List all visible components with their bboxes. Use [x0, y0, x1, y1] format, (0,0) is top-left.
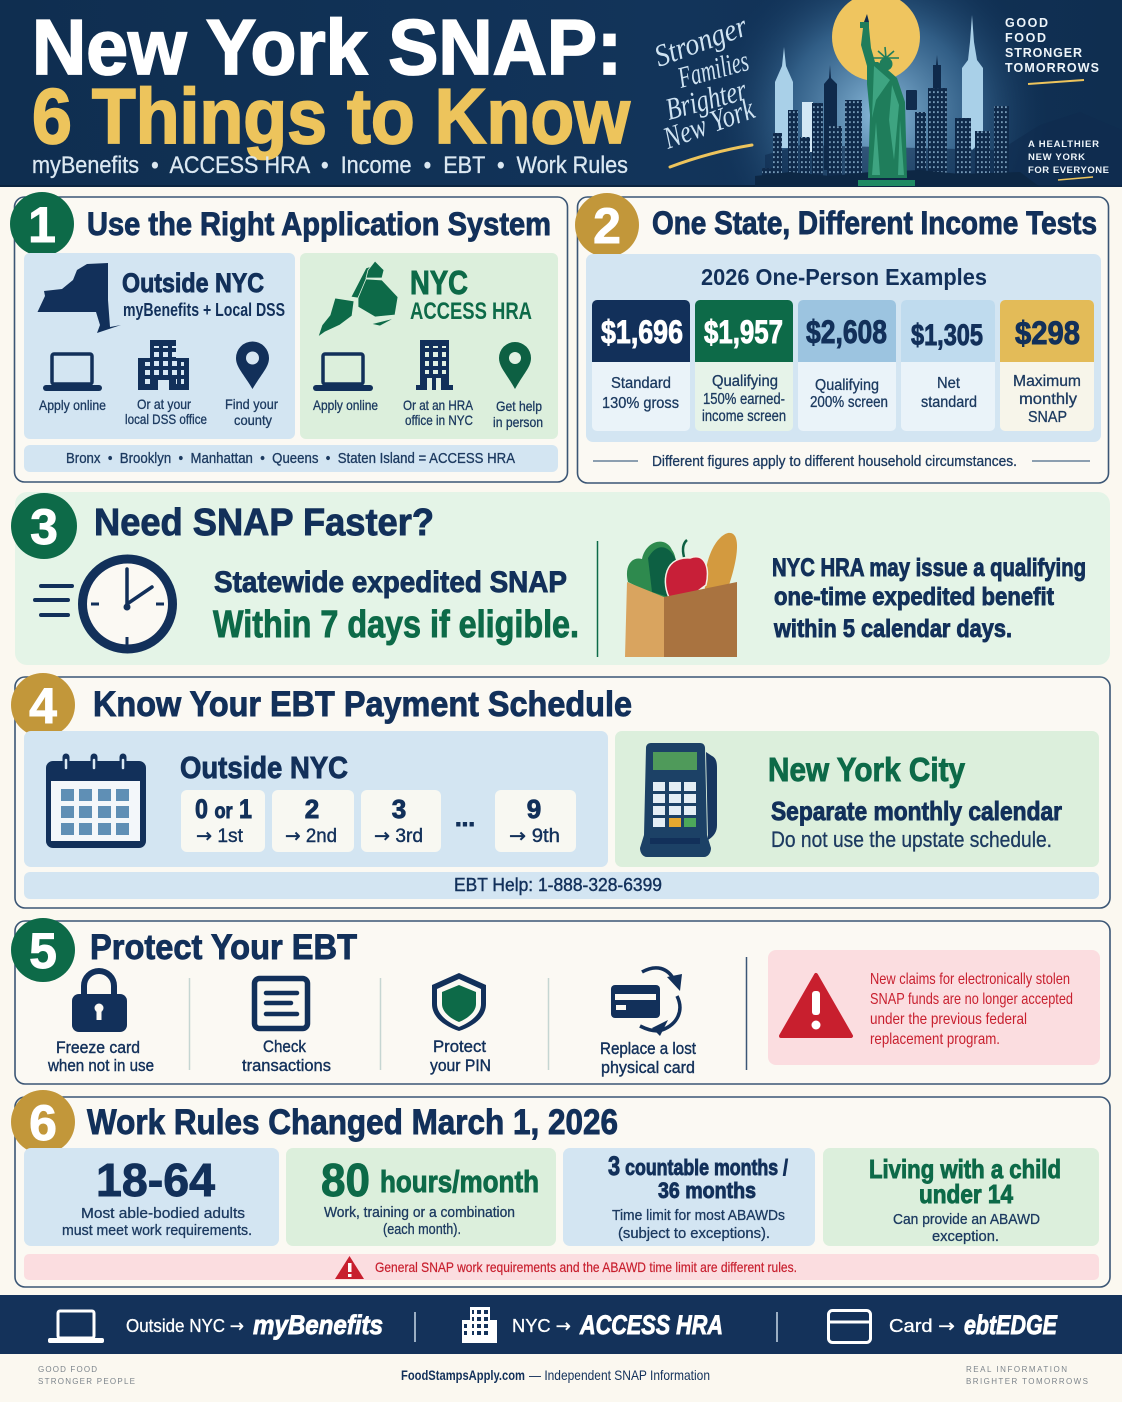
card: 1,696: 130% gross — [602, 395, 679, 412]
card: 80 hours: (each month). — [383, 1221, 461, 1238]
item: protect PIN: Protect — [433, 1037, 486, 1056]
item: freeze card: Freeze card — [56, 1038, 140, 1057]
tagline: healthier: NEW YORK — [1028, 152, 1085, 163]
card: 298: monthly — [1019, 391, 1077, 408]
card: 18-64: must meet work requirements. — [62, 1222, 252, 1239]
outside NYC heading: Outside NYC — [122, 268, 264, 298]
chip: 9: → 9th — [509, 825, 560, 847]
sub-panel: outside NYC schedule — [24, 731, 608, 867]
icon: office building — [138, 340, 189, 390]
tagline: healthier: FOR EVERYONE — [1028, 165, 1109, 176]
NYC route: NYC → — [512, 1316, 571, 1337]
icon: clock — [35, 559, 172, 649]
card: 3 countable months: 36 months — [658, 1178, 756, 1203]
tagline: good food: TOMORROWS — [1005, 61, 1099, 75]
panel 4: EBT payment schedule — [11, 673, 1110, 908]
heading 3: Need SNAP Faster? — [94, 502, 434, 544]
NYC schedule text: Separate monthly calendar — [771, 796, 1062, 826]
tagline: healthier: A HEALTHIER — [1028, 139, 1099, 150]
card: 1,305: standard — [921, 394, 977, 411]
chip: 2: 2 — [305, 794, 319, 824]
item: protect PIN — [430, 973, 491, 1075]
option labels — [39, 396, 278, 428]
card: 3 countable months — [563, 1148, 815, 1246]
warning strip — [24, 1254, 1099, 1280]
NYC heading: NYC — [410, 264, 468, 301]
card: 80 hours: 80 — [321, 1154, 370, 1206]
warning text: replacement program. — [870, 1031, 1000, 1048]
panel 1: application system — [10, 192, 568, 482]
badge 2: 2 — [593, 198, 621, 254]
card: 3 countable months: 3 countable months / — [608, 1151, 788, 1181]
icon: shield — [432, 973, 486, 1031]
card: 2,608: 200% screen — [810, 394, 888, 411]
sub-panel: New York City schedule — [615, 731, 1099, 867]
subtitle topics: myBenefits • ACCESS HRA • Income • EBT • Work Rules — [32, 152, 628, 179]
item: replace card: physical card — [601, 1058, 695, 1077]
tagline: good food: FOOD — [1005, 31, 1046, 45]
chip: 3: → 3rd — [374, 825, 423, 847]
statewide text — [213, 566, 579, 646]
footer right tagline: REAL INFORMATION — [966, 1365, 1067, 1374]
card: 80 hours — [286, 1148, 556, 1246]
card: 1,957: $1,957 — [704, 314, 783, 350]
icon: grocery bag — [625, 533, 737, 657]
heading 6: Work Rules Changed March 1, 2026 — [87, 1103, 618, 1142]
heading 4: Know Your EBT Payment Schedule — [93, 685, 632, 724]
icon: NYC borough map — [318, 261, 398, 337]
title — [32, 3, 630, 160]
card: 80 hours: hours/month — [380, 1164, 539, 1199]
card: 2,608: $2,608 — [806, 314, 887, 350]
option labels: county — [234, 412, 272, 428]
script slogan: New York — [658, 90, 760, 156]
ellipsis: ... — [455, 805, 475, 832]
icon: laptop — [48, 1311, 104, 1343]
card route — [889, 1310, 1058, 1340]
NYC HRA text: within 5 calendar days. — [773, 615, 1012, 643]
card: 1,957 — [695, 300, 793, 431]
badge 5: 5 — [29, 923, 57, 979]
NYC HRA text — [772, 554, 1086, 643]
card: 1,696: Standard — [611, 375, 671, 392]
item: freeze card — [47, 971, 154, 1075]
card: 1,696: $1,696 — [601, 314, 683, 350]
footer right tagline — [966, 1365, 1088, 1386]
badge 3 — [11, 493, 77, 559]
option labels: Apply online — [39, 397, 106, 413]
chip: 0 or 1: 0 or 1 — [195, 794, 252, 824]
icon: warning triangle — [781, 975, 851, 1036]
warning strip: General SNAP work requirements and the ABAWD time limit are different rules. — [375, 1259, 797, 1275]
NYC schedule text: New York City — [768, 751, 966, 788]
chip: 2: → 2nd — [285, 825, 337, 847]
card route: ebtEDGE — [964, 1310, 1058, 1340]
icon: HRA office — [416, 340, 453, 390]
header banner — [0, 0, 1122, 187]
card: 1,957: 150% earned- — [703, 391, 785, 408]
card: 298: SNAP — [1028, 409, 1067, 426]
badge 3: 3 — [30, 499, 58, 555]
badge 6 — [11, 1090, 75, 1154]
icon: card with arrows — [611, 968, 682, 1036]
badge 1: 1 — [28, 197, 56, 253]
warning text: New claims for electronically stolen — [870, 971, 1070, 988]
chip: 3 — [361, 790, 441, 852]
script slogan: Stronger — [649, 8, 752, 74]
icon: map pin — [236, 342, 269, 389]
icon: New York State map — [38, 263, 121, 333]
tagline: healthier — [1028, 139, 1109, 180]
option labels: Or at your — [137, 396, 191, 412]
icon: laptop — [313, 354, 373, 391]
outside NYC route — [126, 1310, 383, 1340]
warning text: under the previous federal — [870, 1011, 1027, 1028]
note: Different figures apply to different household circumstances. — [652, 453, 1017, 470]
item: check transactions — [242, 978, 331, 1075]
icon: green map pin — [499, 342, 531, 389]
EBT help strip: EBT Help: 1-888-328-6399 — [454, 875, 662, 895]
footer right tagline: BRIGHTER TOMORROWS — [966, 1377, 1088, 1386]
item: protect PIN: your PIN — [430, 1056, 491, 1075]
icon: EBT terminal — [640, 743, 717, 857]
item: replace card — [600, 968, 696, 1077]
option labels: Find your — [225, 396, 278, 412]
card: 1,305: $1,305 — [911, 319, 983, 352]
NYC schedule text — [768, 751, 1062, 852]
badge 6: 6 — [29, 1095, 57, 1151]
option labels: Apply online — [313, 397, 378, 413]
card: child under 14: Can provide an ABAWD — [893, 1211, 1040, 1228]
chip: 0 or 1: → 1st — [196, 825, 244, 847]
option labels: Or at an HRA — [403, 397, 474, 413]
card: 298 — [1000, 300, 1094, 431]
footer left tagline: STRONGER PEOPLE — [38, 1377, 135, 1386]
card: 18-64 — [24, 1148, 279, 1246]
EBT help strip — [24, 872, 1099, 899]
tagline: good food: GOOD — [1005, 16, 1048, 30]
quick reference band — [0, 1295, 1122, 1354]
statewide text: Statewide expedited SNAP — [214, 566, 567, 599]
item: replace card: Replace a lost — [600, 1039, 696, 1058]
tagline: good food — [1005, 16, 1099, 84]
title: New York SNAP: — [32, 3, 622, 91]
option labels: in person — [493, 414, 543, 430]
icon: laptop — [43, 354, 102, 391]
outside NYC heading: Outside NYC — [180, 750, 348, 785]
NYC schedule text: Do not use the upstate schedule. — [771, 827, 1052, 852]
tagline: good food: STRONGER — [1005, 46, 1082, 60]
item: freeze card: when not in use — [47, 1056, 154, 1075]
NYC route: ACCESS HRA — [579, 1310, 723, 1340]
statue — [858, 14, 917, 186]
examples heading: 2026 One-Person Examples — [701, 264, 987, 290]
icon: small warning — [335, 1256, 364, 1279]
title: 6 Things to Know — [32, 72, 630, 160]
card: 80 hours: Work, training or a combination — [324, 1204, 515, 1221]
badge 5 — [11, 918, 75, 982]
card: 3 countable months: (subject to exceptions). — [618, 1225, 770, 1242]
option labels: Get help — [496, 398, 542, 414]
panel 2: income tests — [575, 193, 1108, 483]
examples panel — [586, 254, 1101, 442]
badge 1 — [10, 192, 74, 256]
card: 298: Maximum — [1013, 373, 1081, 390]
card route: Card → — [889, 1316, 955, 1337]
card: 3 countable months: Time limit for most ABAWDs — [612, 1207, 785, 1224]
footer left tagline — [38, 1365, 135, 1386]
icon: document — [254, 978, 308, 1028]
badge 4 — [11, 673, 75, 737]
badge 4: 4 — [29, 678, 57, 734]
NYC HRA text: one-time expedited benefit — [774, 583, 1055, 611]
sub-panel: outside NYC — [24, 253, 295, 439]
badge 2 — [575, 193, 639, 257]
card: 18-64: Most able-bodied adults — [81, 1205, 245, 1222]
card: child under 14: Living with a child — [869, 1154, 1061, 1184]
sub-panel: NYC — [300, 253, 558, 439]
script slogan: Brighter — [662, 72, 751, 127]
outside NYC heading — [122, 268, 285, 320]
panel 6: work rules — [11, 1090, 1110, 1287]
option labels: local DSS office — [125, 411, 207, 427]
script slogan: Families — [674, 44, 752, 95]
footer left tagline: GOOD FOOD — [38, 1365, 97, 1374]
script slogan — [649, 8, 760, 167]
outside NYC route: Outside NYC → — [126, 1316, 244, 1337]
card: 2,608 — [798, 300, 896, 431]
outside NYC route: myBenefits — [253, 1310, 383, 1340]
card: 1,957: Qualifying — [712, 373, 778, 390]
chip: 9 — [495, 790, 576, 852]
chip: 2 — [272, 790, 354, 852]
card: 18-64: 18-64 — [96, 1154, 215, 1206]
statewide text: Within 7 days if eligible. — [213, 604, 579, 646]
panel 5: protect your EBT — [11, 918, 1110, 1084]
footer credit: FoodStampsApply.com — [401, 1367, 525, 1383]
card: child under 14: exception. — [932, 1228, 999, 1245]
option labels: office in NYC — [405, 412, 473, 428]
card: 298: $298 — [1015, 315, 1080, 351]
icon: padlock — [72, 971, 127, 1032]
card: child under 14 — [823, 1148, 1099, 1246]
borough strip: Bronx • Brooklyn • Manhattan • Queens • Staten Island = ACCESS HRA — [66, 450, 515, 467]
card: child under 14: under 14 — [919, 1179, 1013, 1209]
icon: building — [462, 1307, 497, 1343]
item: check transactions: transactions — [242, 1056, 331, 1075]
panel 3: need SNAP faster — [11, 492, 1110, 665]
NYC route — [512, 1310, 723, 1340]
NYC heading — [410, 264, 532, 325]
chip: 3: 3 — [392, 794, 406, 824]
warning callout — [768, 950, 1100, 1065]
outside NYC heading: myBenefits + Local DSS — [123, 300, 285, 320]
footer credit: — Independent SNAP Information — [529, 1367, 710, 1383]
card: 1,305 — [901, 300, 995, 431]
heading 1: Use the Right Application System — [87, 206, 551, 242]
item: check transactions: Check — [263, 1037, 306, 1056]
footer credit — [401, 1367, 710, 1383]
borough strip — [24, 445, 558, 472]
card: 1,305: Net — [937, 375, 961, 392]
NYC heading: ACCESS HRA — [410, 298, 532, 325]
card: 1,957: income screen — [702, 408, 786, 425]
chip: 9: 9 — [527, 794, 541, 824]
icon: calendar — [46, 757, 146, 848]
icon: card — [828, 1310, 871, 1342]
card: 2,608: Qualifying — [815, 377, 879, 394]
warning text: SNAP funds are no longer accepted — [870, 991, 1073, 1008]
chip: 0 or 1 — [181, 790, 265, 852]
warning text — [870, 971, 1073, 1048]
option labels — [313, 397, 543, 430]
skyline with moon and Statue of Liberty — [755, 0, 1122, 187]
card: 1,696 — [592, 300, 690, 431]
heading 5: Protect Your EBT — [90, 928, 357, 967]
